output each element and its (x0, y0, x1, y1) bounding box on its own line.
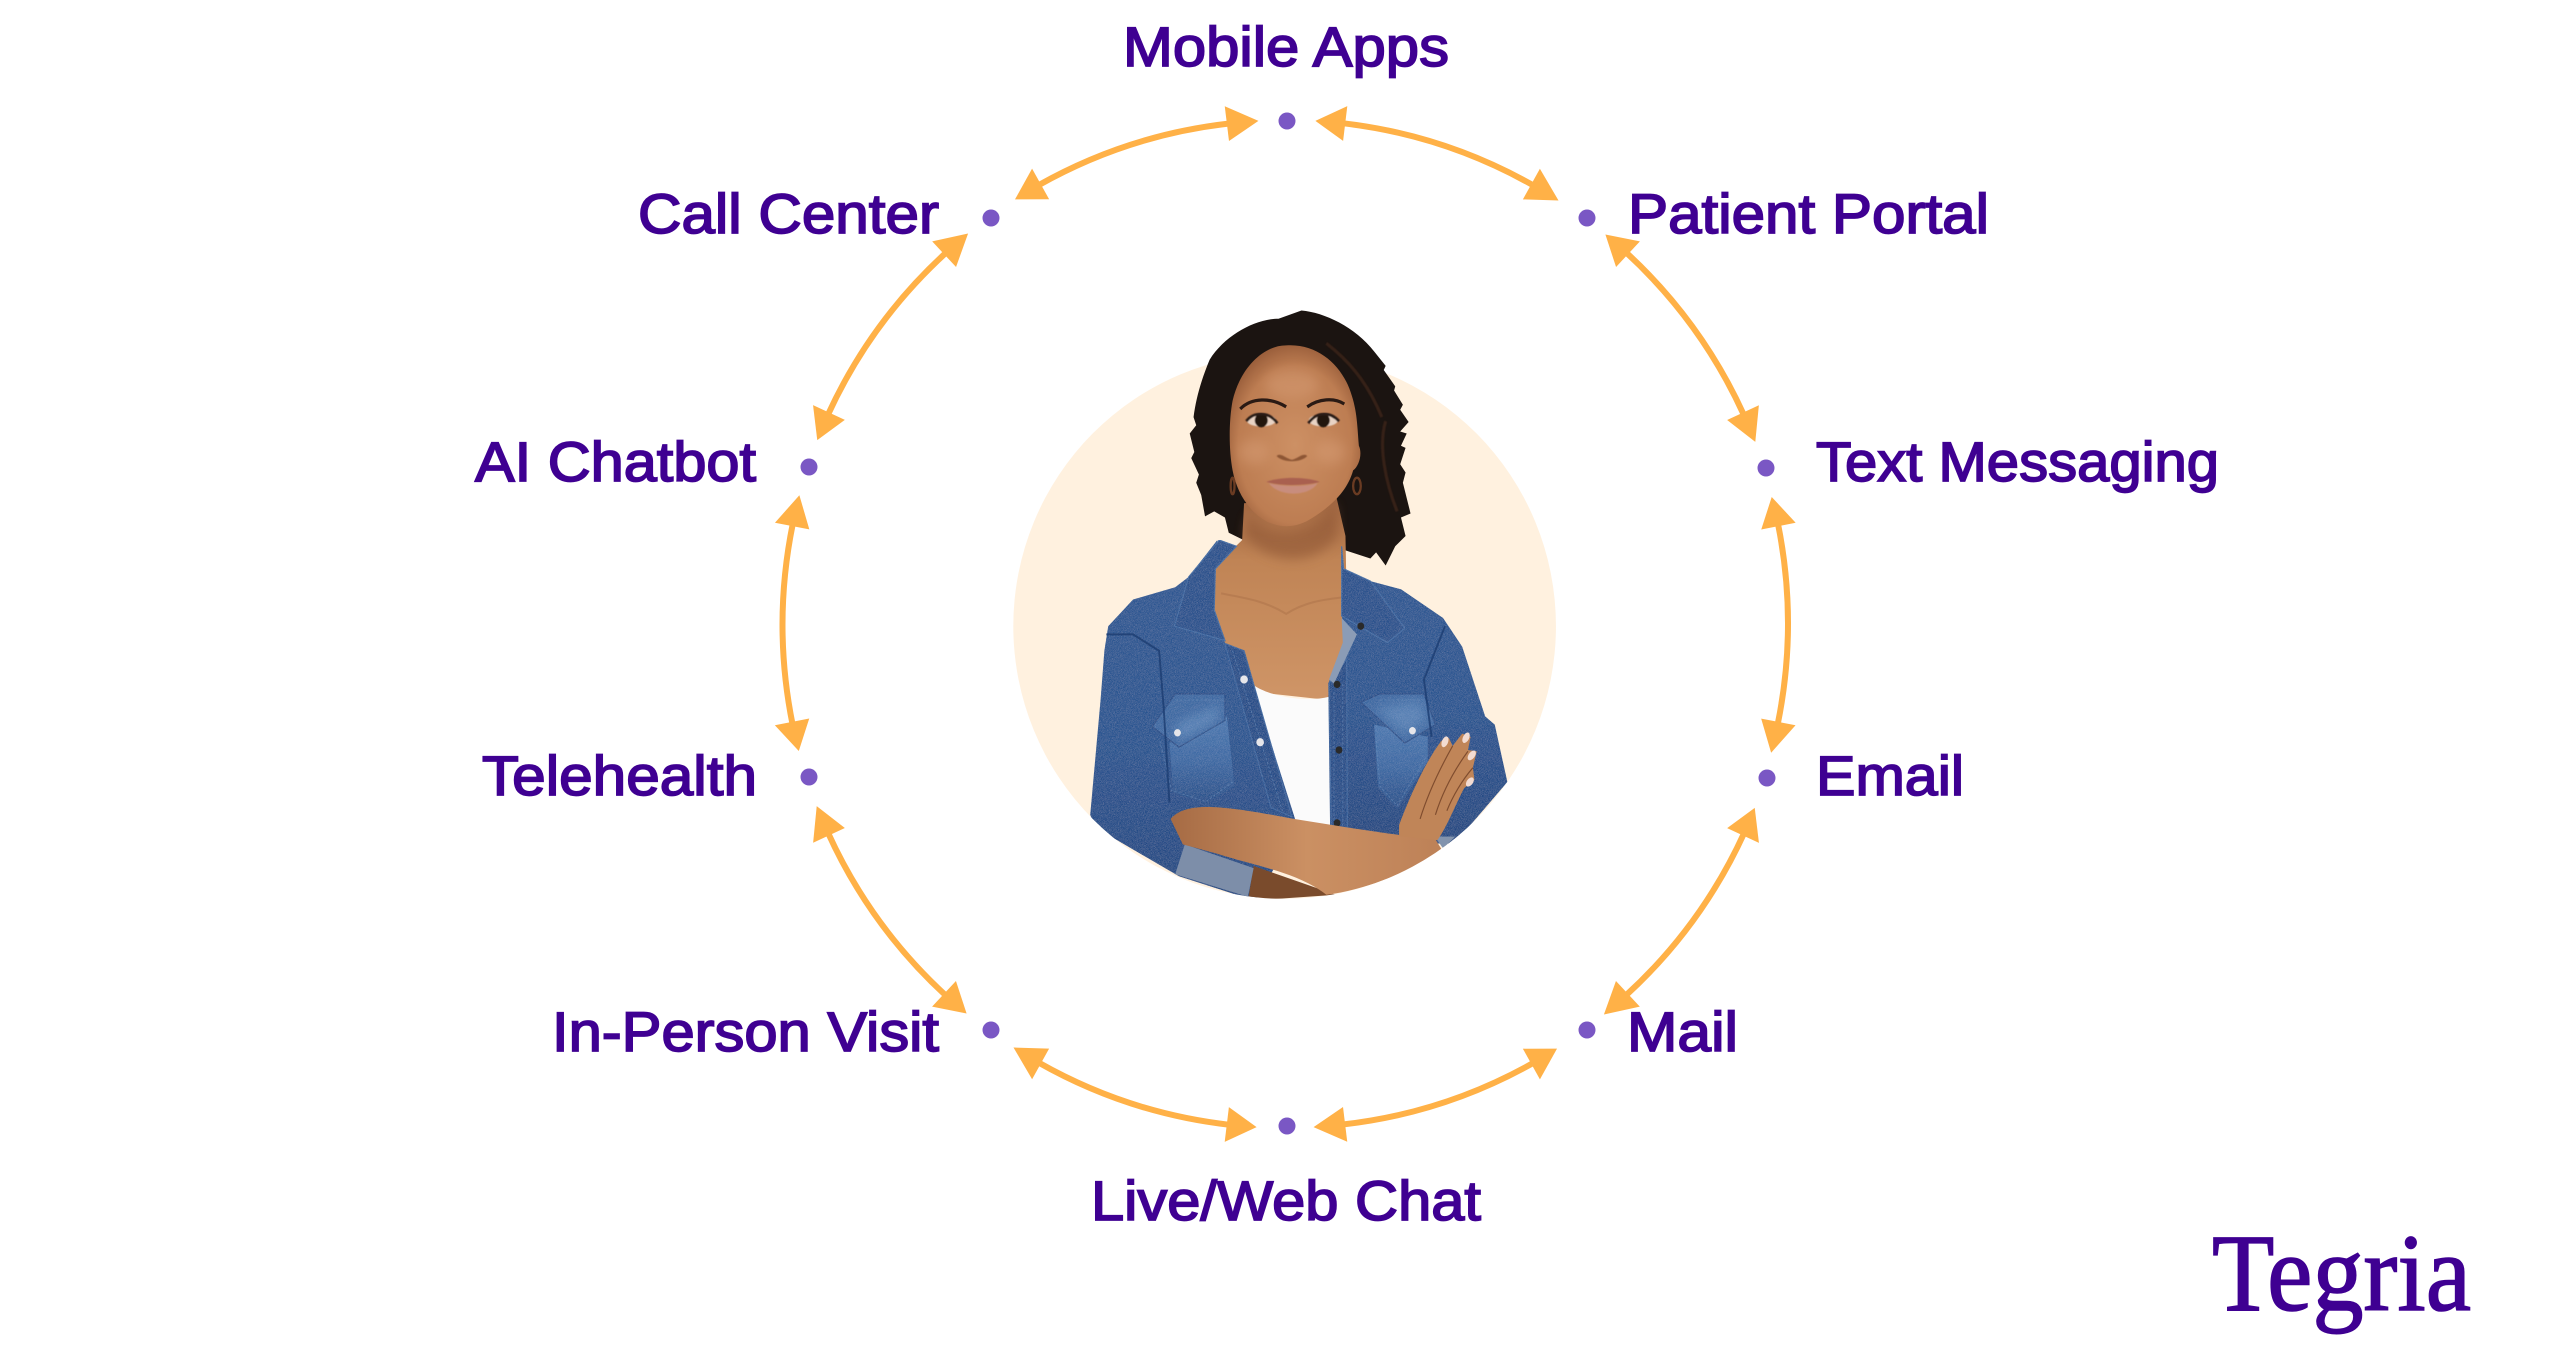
arrow: Mail to Live/Web Chat (1314, 984, 1566, 1203)
earrings (1231, 478, 1361, 494)
arrow: In-Person Visit to Telehealth (761, 806, 1013, 1025)
neck shadow (1244, 503, 1338, 559)
neck and chest (1206, 495, 1347, 700)
dot: Call Center (982, 210, 1000, 226)
illustration: woman in denim jacket on cream circle (1013, 310, 1556, 901)
hand (1399, 734, 1477, 840)
jacket stitching (1160, 651, 1426, 835)
brown underside and belt (1248, 866, 1336, 901)
white tee (1254, 686, 1330, 824)
left flap fade (1175, 704, 1221, 741)
right collar (1342, 546, 1405, 643)
cheek highlights (1238, 370, 1345, 464)
dot: Live/Web Chat (1278, 1118, 1296, 1134)
dot: Text Messaging (1758, 460, 1774, 476)
jacket right side (1328, 546, 1507, 844)
dot: In-Person Visit (982, 1022, 1000, 1038)
arrow: Call Center to Mobile Apps (1006, 45, 1258, 264)
nails (1441, 732, 1476, 787)
label: Patient Portal: Patient Portal (1628, 182, 1989, 245)
arrow: Live/Web Chat to In-Person Visit (1014, 1048, 1257, 1142)
label: Live/Web Chat: Live/Web Chat (1091, 1169, 1481, 1232)
panel: channel cycle diagram (475, 15, 2219, 1232)
right pocket (1374, 725, 1428, 810)
cuff left (1175, 844, 1254, 897)
right pocket flap (1361, 694, 1435, 743)
right flap fade (1380, 699, 1427, 734)
label: Mail: Mail (1627, 1000, 1738, 1063)
label: Telehealth: Telehealth (482, 744, 757, 807)
cuff right (1437, 836, 1456, 848)
forearm (1171, 807, 1443, 895)
jacket left side (1090, 540, 1298, 901)
arrow: Mobile Apps to Patient Portal (1315, 106, 1558, 200)
nose (1277, 455, 1307, 461)
collarbone shading (1221, 593, 1342, 614)
dot: Patient Portal (1578, 210, 1596, 226)
label: AI Chatbot: AI Chatbot (475, 430, 756, 493)
left sleeve seam (1106, 634, 1169, 802)
jacket inner lining (1329, 618, 1357, 684)
jacket (1090, 540, 1507, 901)
arrow: Telehealth to AI Chatbot (710, 495, 874, 756)
dot: Mobile Apps (1278, 112, 1296, 130)
hair highlights (1326, 343, 1397, 511)
eyes (1246, 413, 1339, 427)
logo: Tegria: Tegria (2212, 1212, 2471, 1334)
eyebrows (1240, 400, 1344, 409)
dot: Telehealth (800, 768, 818, 786)
label: Mobile Apps: Mobile Apps (1123, 15, 1449, 78)
left collar (1174, 540, 1236, 641)
left placket (1225, 643, 1292, 817)
label: Call Center: Call Center (638, 182, 939, 245)
jacket buttons (1174, 675, 1416, 746)
arrow: Text Messaging to Email (1696, 492, 1861, 753)
right placket (1329, 659, 1347, 839)
jacket rivets (1334, 623, 1364, 827)
arrow: Patient Portal to Text Messaging (1559, 223, 1811, 442)
left pocket (1170, 716, 1234, 790)
dot: Mail (1578, 1022, 1596, 1038)
cream background circle (1013, 354, 1556, 899)
face (1230, 345, 1360, 526)
lips (1266, 478, 1320, 494)
finger gaps (1420, 746, 1473, 819)
label: Text Messaging: Text Messaging (1816, 430, 2219, 493)
hair back (1190, 310, 1411, 566)
arrow: AI Chatbot to Call Center (803, 204, 968, 465)
right sleeve seam (1424, 626, 1445, 737)
arrow: Email to Mail (1604, 783, 1769, 1044)
dot: AI Chatbot (800, 458, 818, 476)
left pocket flap (1152, 694, 1225, 747)
dot: Email (1758, 770, 1776, 786)
label: In-Person Visit: In-Person Visit (552, 1000, 939, 1063)
label: Email: Email (1816, 744, 1964, 807)
